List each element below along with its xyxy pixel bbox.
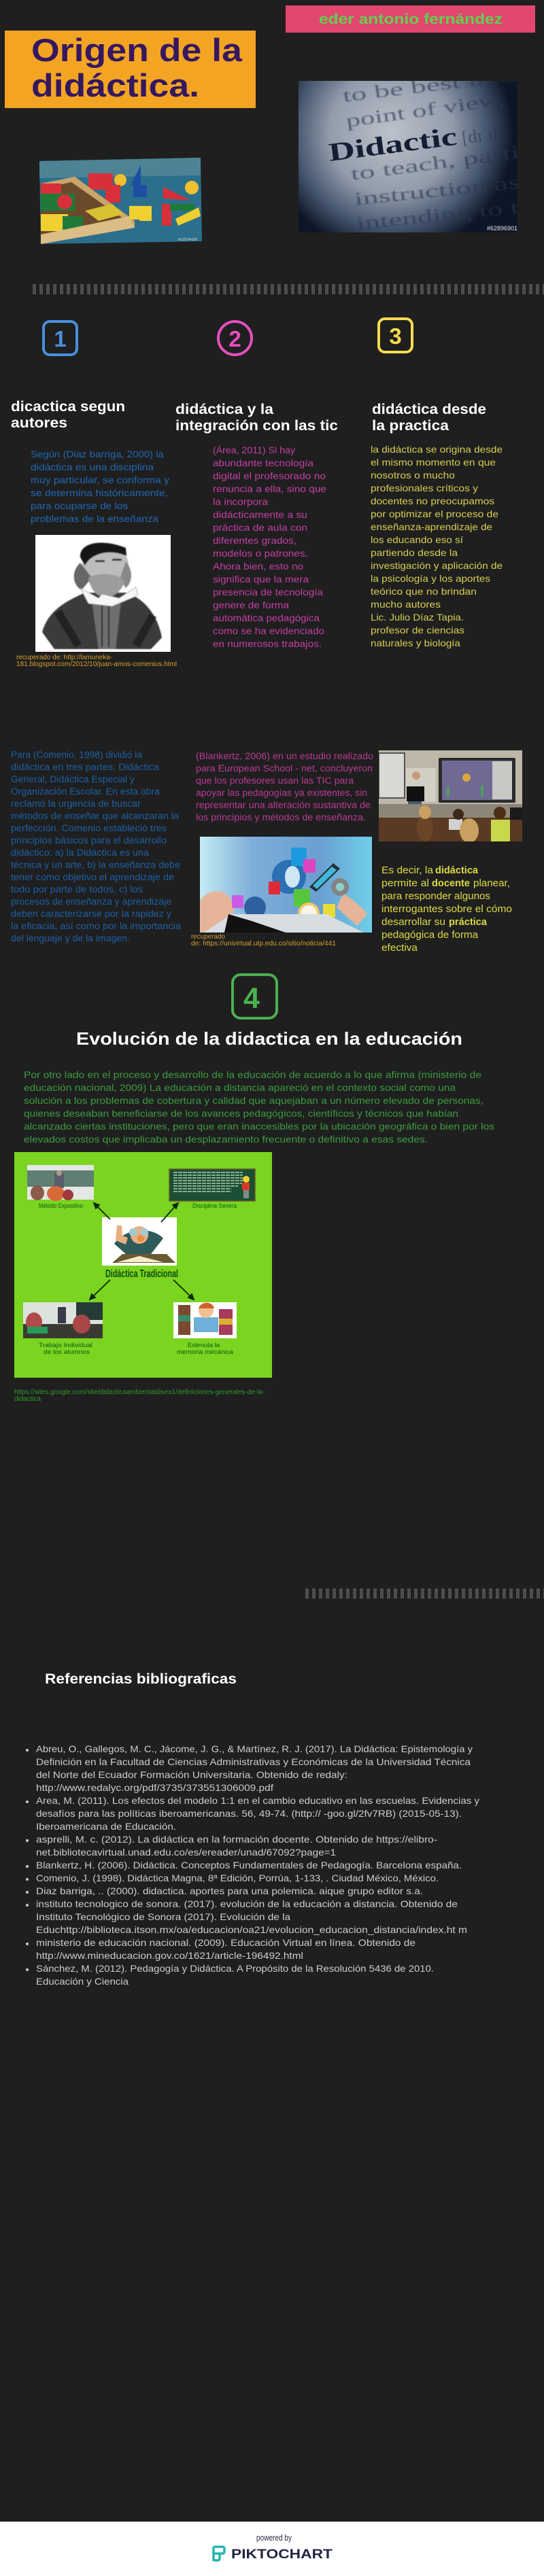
image: digital technology hands bbox=[200, 837, 372, 933]
photo: expository method bbox=[27, 1165, 94, 1201]
text: column 2: modelos o patrones. bbox=[213, 548, 308, 559]
icon: Piktochart logo bbox=[214, 2547, 224, 2561]
text: evolution paragraph: solución a los problemas de cobertura y calidad que aquejaban a un número elevado de personas, bbox=[24, 1095, 483, 1106]
text: Comenio paragraph: deben caracterizarse por la rapidez y bbox=[11, 909, 171, 919]
heading: references: Referencias bibliograficas bbox=[45, 1671, 237, 1687]
caption: portrait source: recuperado de: http://lamuneka- bbox=[16, 653, 112, 661]
footer: powered by Piktochart bbox=[0, 2522, 544, 2576]
text: Comenio paragraph: principios básicos para el desarrollo bbox=[11, 835, 167, 846]
text: column 3: el mismo momento en que bbox=[371, 457, 496, 468]
caption: portrait source: 181.blogspot.com/2012/10/juan-amos-comenius.html bbox=[16, 660, 177, 668]
text: yellow statement: permite al bbox=[381, 878, 429, 889]
author name banner: eder antonio fernández bbox=[319, 12, 503, 27]
text: column 2: renuncia a ella, sino que bbox=[213, 483, 326, 494]
text: evolution paragraph: elevados costos que implicaba un desplazamiento frecuente o definitivo a esas sedes. bbox=[24, 1134, 428, 1145]
image: dictionary entry Didactic: to be best in an bbox=[341, 63, 530, 106]
image: mechanical memory bbox=[173, 1302, 237, 1338]
text: Comenio paragraph: todo por parte de todos, c) los bbox=[11, 884, 143, 894]
diagram labels: Trabajo Individual bbox=[39, 1342, 92, 1348]
text: column 1: muy particular, se conforma y bbox=[31, 474, 169, 485]
caption: portrait source bbox=[16, 653, 177, 668]
text: Comenio paragraph: Organización Escolar. En esta obra bbox=[11, 786, 160, 797]
photo: severe discipline chalkboard bbox=[169, 1169, 255, 1201]
references list: Comenio, J. (1998). Didáctica Magna, 8ª Edición, Porrúa, 1-133, . Ciudad México, México. bbox=[36, 1873, 439, 1883]
photo: individual work bbox=[23, 1302, 103, 1338]
image: dictionary entry Didactic: Didactic bbox=[327, 122, 459, 167]
text: yellow statement: para responder algunos bbox=[381, 891, 490, 902]
text: column 2: en numerosos trabajos. bbox=[213, 638, 322, 649]
text: Comenio paragraph: procesos de enseñanza y aprendizaje bbox=[11, 897, 171, 907]
references list: Educhttp://biblioteca.itson.mx/oa/educacion/oa21/evolucion_educacion_distancia/index.ht m bbox=[36, 1924, 467, 1935]
text: yellow statement: planear, bbox=[473, 878, 510, 889]
references list: Definición en la Facultad de Ciencias Administrativas y Económicas de la Universidad Técnica bbox=[36, 1756, 471, 1767]
heading: evolution: Evolución de la didactica en la educación bbox=[76, 1028, 462, 1049]
text: column 3: la didáctica se origina desde bbox=[371, 444, 503, 455]
text: Comenio paragraph: reclamó la urgencia de buscar bbox=[11, 799, 141, 809]
text: Comenio paragraph: la eficacia, así como por la importancia bbox=[11, 921, 182, 931]
text: yellow statement: práctica bbox=[449, 917, 488, 928]
author name banner bbox=[286, 5, 535, 33]
diagram labels: Estimula la bbox=[188, 1342, 220, 1348]
references list: desafíos para las políticas iberoamericanas. 56, 49-74. (http:// -goo.gl/2fv7RB) (2015-05-13). bbox=[36, 1808, 462, 1819]
image: dictionary entry Didactic: intending to t bbox=[355, 196, 520, 234]
badge 4 bbox=[233, 975, 277, 1018]
text: column 1: para ocuparse de los bbox=[31, 500, 128, 511]
text: column 3: los educando eso sí bbox=[371, 534, 463, 545]
diagram: didáctica tradicional bbox=[14, 1152, 272, 1378]
text: Comenio paragraph: perfección. Comenio estableció tres bbox=[11, 823, 167, 833]
text: Blankertz paragraph bbox=[196, 751, 373, 822]
text: column 3: partiendo desde la bbox=[371, 547, 458, 558]
text: column 2: (Área, 2011) Si hay bbox=[213, 445, 295, 455]
footer: powered by Piktochart: powered by bbox=[256, 2533, 292, 2543]
references list: net.bibliotecavirtual.unad.edu.co/es/ereader/unad/67092?page=1 bbox=[36, 1847, 336, 1858]
text: column 3: mucho autores bbox=[371, 599, 441, 610]
heading: column 1: autores bbox=[11, 415, 67, 431]
diagram labels: Disciplina Severa bbox=[192, 1202, 237, 1209]
references list: Instituto Tecnológico de Sonora (2017). Evolución de la bbox=[36, 1911, 290, 1922]
caption: diagram source bbox=[14, 1388, 265, 1403]
text: column 3 bbox=[371, 444, 503, 648]
text: column 3: teórico que no brindan bbox=[371, 586, 477, 597]
heading: column 2: didáctica y la bbox=[175, 402, 273, 417]
caption: diagram source: didactica bbox=[14, 1395, 41, 1403]
image: dictionary entry Didactic bbox=[299, 81, 517, 232]
caption: technology image source: recuperado bbox=[191, 933, 225, 941]
references list: Sánchez, M. (2012). Pedagogía y Didáctica. A Propósito de la Resolución 5436 de 2010. bbox=[36, 1963, 434, 1974]
text: column 2: abundante tecnología bbox=[213, 457, 313, 468]
text: column 3: profesor de ciencias bbox=[371, 625, 464, 636]
text: column 2 bbox=[213, 445, 326, 649]
text: column 3: docentes no preocupamos bbox=[371, 495, 494, 506]
text: yellow statement: Es decir, la bbox=[381, 865, 434, 876]
badge 4: 4 bbox=[243, 982, 260, 1015]
image: portrait of Comenius bbox=[35, 535, 171, 652]
image: dictionary entry Didactic: [dɪˈd bbox=[460, 123, 499, 148]
text: Comenio paragraph: Para (Comenio, 1998) dividió la bbox=[11, 750, 142, 760]
label: didáctica tradicional: Didáctica Tradicional bbox=[105, 1268, 178, 1280]
text: column 3: nosotros o mucho bbox=[371, 470, 455, 481]
references list: http://www.redalyc.org/pdf/3735/373551306009.pdf bbox=[36, 1782, 273, 1793]
image: professor bbox=[102, 1217, 177, 1266]
references list: http://www.mineducacion.gov.co/1621/article-196492.html bbox=[36, 1950, 303, 1961]
references list: Abreu, O., Gallegos, M. C., Jácome, J. G., & Martínez, R. J. (2017). La Didáctica: Epistemología y bbox=[36, 1743, 473, 1754]
references list: Iberoamericana de Educación. bbox=[36, 1821, 176, 1832]
heading: column 1 bbox=[11, 399, 125, 431]
diagram labels: Método Expositivo bbox=[39, 1202, 83, 1209]
text: yellow statement: efectiva bbox=[381, 943, 418, 954]
title bbox=[5, 31, 256, 108]
text: evolution paragraph: Por otro lado en el proceso y desarrollo de la educación de acuerdo a lo que afirma (ministerio de bbox=[24, 1069, 481, 1080]
text: Blankertz paragraph: representar una alteración sustantiva de bbox=[196, 800, 371, 810]
text: yellow statement: didáctica bbox=[435, 865, 479, 876]
text: Comenio paragraph: métodos de enseñar que alcanzaran la bbox=[11, 811, 180, 821]
text: Blankertz paragraph: apoyar las pedagogías ya existentes, sin bbox=[196, 788, 367, 798]
arrows bbox=[90, 1203, 194, 1300]
text: column 2: Ahora bien, esto no bbox=[213, 561, 303, 572]
heading: column 1: dicactica segun bbox=[11, 399, 125, 415]
diagram labels: memoria mecánica bbox=[177, 1348, 233, 1355]
text: yellow statement: desarrollar su bbox=[381, 917, 445, 928]
heading: column 3 bbox=[372, 402, 486, 434]
heading: column 2 bbox=[175, 402, 338, 434]
text: Blankertz paragraph: los principios y métodos de enseñanza. bbox=[196, 812, 366, 822]
text: column 3: enseñanza-aprendizaje de bbox=[371, 521, 492, 532]
text: Blankertz paragraph: para European School - net, concluyeron bbox=[196, 763, 373, 773]
caption: diagram source: https://sites.google.com/site/didacticaambientaldisea1/definiciones-generales-de-la- bbox=[14, 1388, 265, 1396]
heading: column 2: integración con las tic bbox=[175, 418, 338, 434]
text: column 1: se determina históricamente, bbox=[31, 487, 168, 498]
references list: asprelli, M. c. (2012). La didáctica en la formación docente. Obtenido de https://elibro- bbox=[36, 1834, 437, 1845]
references list: del Norte del Ecuador Formación Universitaria. Obtenido de redaly: bbox=[36, 1769, 347, 1780]
text: column 2: práctica de aula con bbox=[213, 522, 307, 533]
image: dictionary entry Didactic: point of view, bbox=[345, 89, 506, 131]
text: column 1 bbox=[31, 449, 169, 524]
references list: instituto tecnologico de sonora. (2017). evolución de la educación a distancia. Obtenido de bbox=[36, 1898, 458, 1909]
text: column 3: la psicología y los aportes bbox=[371, 573, 490, 584]
badge 3: 3 bbox=[389, 324, 402, 349]
heading: column 3: didáctica desde bbox=[372, 402, 486, 417]
text: yellow statement bbox=[381, 865, 512, 954]
text: Comenio paragraph: didáctico: a) la Didáctica es una bbox=[11, 848, 150, 858]
text: evolution paragraph: alcanzado ciertas instituciones, pero que eran inaccesibles por la ubicación geográfica o bien por los bbox=[24, 1121, 494, 1132]
text: Blankertz paragraph: (Blankertz, 2006) en un estudio realizado bbox=[196, 751, 373, 761]
text: column 3: Lic. Julio Díaz Tapia. bbox=[371, 612, 464, 623]
references list: Area, M. (2011). Los efectos del modelo 1:1 en el cambio educativo en las escuelas. Evidencias y bbox=[36, 1795, 479, 1806]
text: evolution paragraph: quienes deseaban beneficiarse de los avances pedagógicos, científicos y técnicos que habían bbox=[24, 1108, 458, 1119]
badge 2 bbox=[218, 321, 252, 355]
text: column 2: didácticamente a su bbox=[213, 509, 307, 520]
badge 1: 1 bbox=[54, 326, 67, 351]
text: column 2: genere de forma bbox=[213, 599, 289, 610]
caption: technology image source: de: https://univirtual.utp.edu.co/sitio/noticia/441 bbox=[191, 939, 336, 947]
image: dictionary entry Didactic: instruction as bbox=[353, 172, 521, 209]
text: column 2: diferentes grados, bbox=[213, 535, 296, 546]
diagram labels: de los alumnos bbox=[44, 1348, 90, 1355]
text: Comenio paragraph: técnica y un arte, b) la enseñanza debe bbox=[11, 860, 180, 870]
references list: Blankertz, H. (2006). Didáctica. Conceptos Fundamentales de Pedagogía. Barcelona españa. bbox=[36, 1860, 462, 1870]
diagram labels bbox=[39, 1202, 237, 1355]
image: dictionary entry Didactic: to teach, parti bbox=[350, 142, 521, 184]
text: Comenio paragraph: del lenguaje y de la imagen. bbox=[11, 933, 130, 943]
text: column 3: naturales y biología bbox=[371, 638, 460, 648]
badge 1 bbox=[44, 321, 77, 355]
text: column 2: digital el profesorado no bbox=[213, 470, 326, 481]
text: column 1: problemas de la enseñanza bbox=[31, 513, 158, 524]
text: Comenio paragraph: tener como objetivo el aprendizaje de bbox=[11, 872, 174, 882]
text: yellow statement: pedagógica de forma bbox=[381, 930, 479, 941]
heading: column 3: la practica bbox=[372, 418, 449, 434]
text: column 2: como se ha evidenciado bbox=[213, 625, 324, 636]
divider strip top bbox=[33, 284, 544, 294]
text: column 2: automática pedagógica bbox=[213, 612, 320, 623]
text: column 1: Según (Diaz barriga, 2000) la bbox=[31, 449, 164, 459]
image: wooden blocks: A115154196 bbox=[178, 238, 197, 242]
text: Blankertz paragraph: que los profesores usan las TIC para bbox=[196, 776, 354, 786]
text: column 2: significa que la mera bbox=[213, 574, 309, 585]
text: column 3: profesionales críticos y bbox=[371, 483, 478, 493]
footer: powered by Piktochart: PIKTOCHART bbox=[231, 2547, 333, 2562]
text: yellow statement: docente bbox=[432, 878, 470, 889]
text: Comenio paragraph: General, Didáctica Especial y bbox=[11, 774, 135, 784]
text: column 3: investigación y aplicación de bbox=[371, 560, 503, 571]
text: yellow statement: interrogantes sobre el cómo bbox=[381, 904, 512, 915]
image: teacher in classroom bbox=[379, 750, 522, 843]
image: dictionary entry Didactic: #62896901 bbox=[487, 225, 517, 232]
text: column 2: la incorpora bbox=[213, 496, 268, 507]
text: evolution paragraph: educación nacional, 2009) La educación a distancia apareció en el contexto social como una bbox=[24, 1082, 456, 1093]
title: Origen de la bbox=[31, 32, 243, 68]
text: column 3: por optimizar el proceso de bbox=[371, 508, 498, 519]
caption: technology image source bbox=[191, 933, 336, 947]
references list: ministerio de educación nacional. (2009). Educación Virtual en línea. Obtenido de bbox=[36, 1937, 415, 1948]
badge 2: 2 bbox=[228, 326, 241, 351]
references list: Educación y Ciencia bbox=[36, 1976, 129, 1987]
text: column 2: presencia de tecnología bbox=[213, 587, 323, 597]
divider strip lower bbox=[305, 1588, 544, 1599]
text: Comenio paragraph: didáctica en tres partes: Didáctica bbox=[11, 762, 160, 772]
text: evolution paragraph bbox=[24, 1069, 494, 1145]
badge 3 bbox=[379, 319, 412, 352]
title: didáctica. bbox=[31, 67, 199, 103]
text: column 1: didáctica es una disciplina bbox=[31, 462, 154, 472]
image: wooden blocks bbox=[39, 158, 202, 244]
references list bbox=[26, 1743, 479, 1987]
references list: Diaz barriga, .. (2000). didactica. aportes para una polemica. aique grupo editor s.a. bbox=[36, 1885, 423, 1896]
text: Comenio paragraph bbox=[11, 750, 182, 943]
